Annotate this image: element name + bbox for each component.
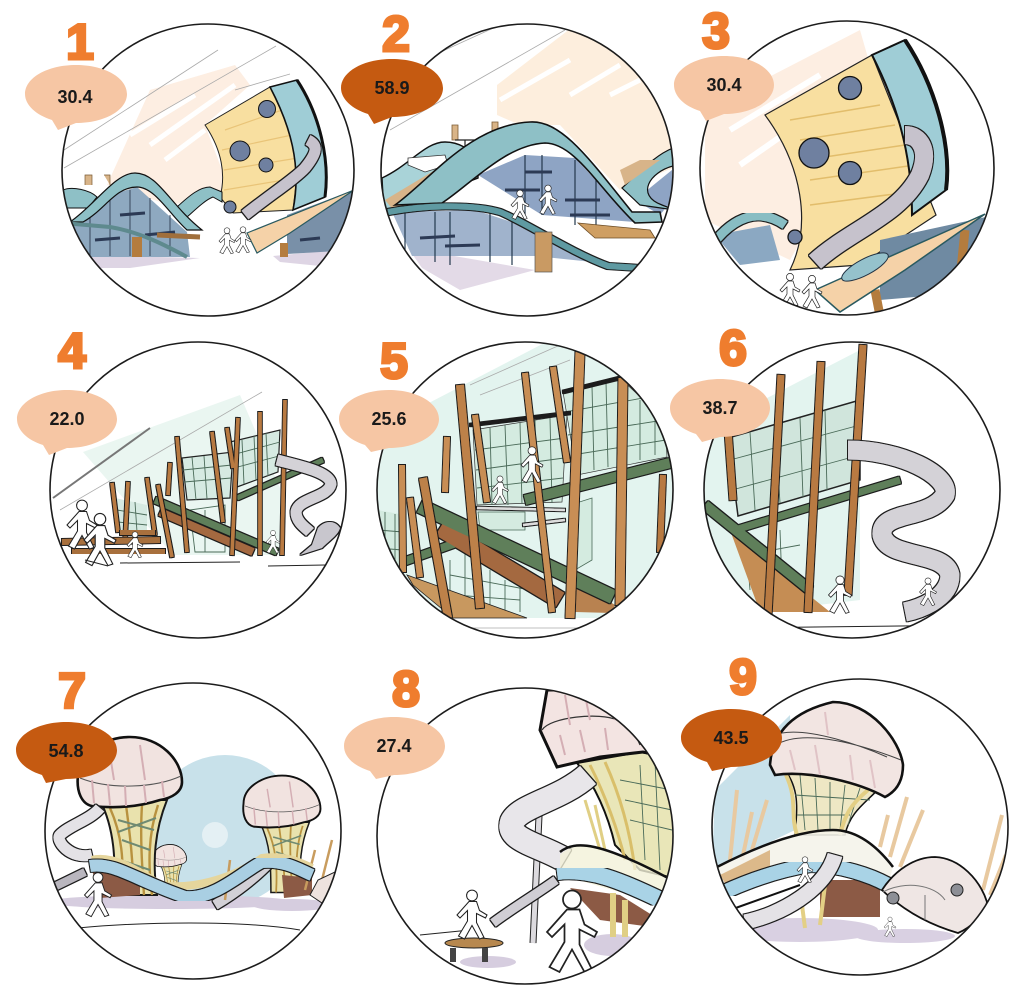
number 4 with score bubble bbox=[17, 323, 117, 455]
scene 8: mushroom tower with spring rider and children bbox=[420, 690, 682, 972]
scene 1: wave building and yellow wall bbox=[63, 46, 354, 268]
number 9 with score bubble bbox=[681, 649, 782, 771]
number 5 with score bubble: 5 bbox=[380, 333, 408, 389]
number 5 with score bubble bbox=[339, 333, 439, 452]
number 1 with score bubble: 30.4 bbox=[57, 87, 93, 107]
number 6 with score bubble: 38.7 bbox=[702, 398, 738, 418]
number 7 with score bubble: 7 bbox=[58, 663, 86, 719]
number 5 with score bubble: 25.6 bbox=[371, 409, 407, 429]
scene 6: timber poles and spiral slide close view bbox=[705, 345, 985, 628]
number 8 with score bubble: 8 bbox=[392, 661, 420, 717]
number 3 with score bubble bbox=[674, 3, 774, 121]
number 6 with score bubble bbox=[670, 320, 770, 442]
scene 3: yellow wall close view bbox=[705, 30, 995, 316]
number 6 with score bubble: 6 bbox=[719, 320, 747, 376]
number 2 with score bubble bbox=[341, 6, 443, 124]
number 4 with score bubble: 22.0 bbox=[49, 409, 85, 429]
number 9 with score bubble: 9 bbox=[729, 649, 757, 705]
number 7 with score bubble: 54.8 bbox=[48, 741, 84, 761]
number 1 with score bubble bbox=[25, 14, 127, 130]
scene 4: timber poles and spiral slide bbox=[53, 392, 340, 566]
number 3 with score bubble: 30.4 bbox=[706, 75, 742, 95]
number 2 with score bubble: 2 bbox=[382, 6, 410, 62]
number 2 with score bubble: 58.9 bbox=[374, 78, 410, 98]
scene 7: two mushroom towers with wavy band bbox=[45, 737, 350, 930]
number 9 with score bubble: 43.5 bbox=[713, 728, 749, 748]
number 4 with score bubble: 4 bbox=[58, 323, 86, 379]
scene 5: timber poles close view bbox=[370, 340, 680, 628]
number 3 with score bubble: 3 bbox=[702, 3, 730, 59]
number 7 with score bubble bbox=[16, 663, 117, 783]
scene 2: wave building close view bbox=[382, 25, 680, 290]
number 8 with score bubble bbox=[344, 661, 445, 779]
number 1 with score bubble: 1 bbox=[66, 14, 94, 70]
scene 9: mushroom tower with small dome bbox=[712, 702, 1006, 943]
number 8 with score bubble: 27.4 bbox=[376, 736, 412, 756]
